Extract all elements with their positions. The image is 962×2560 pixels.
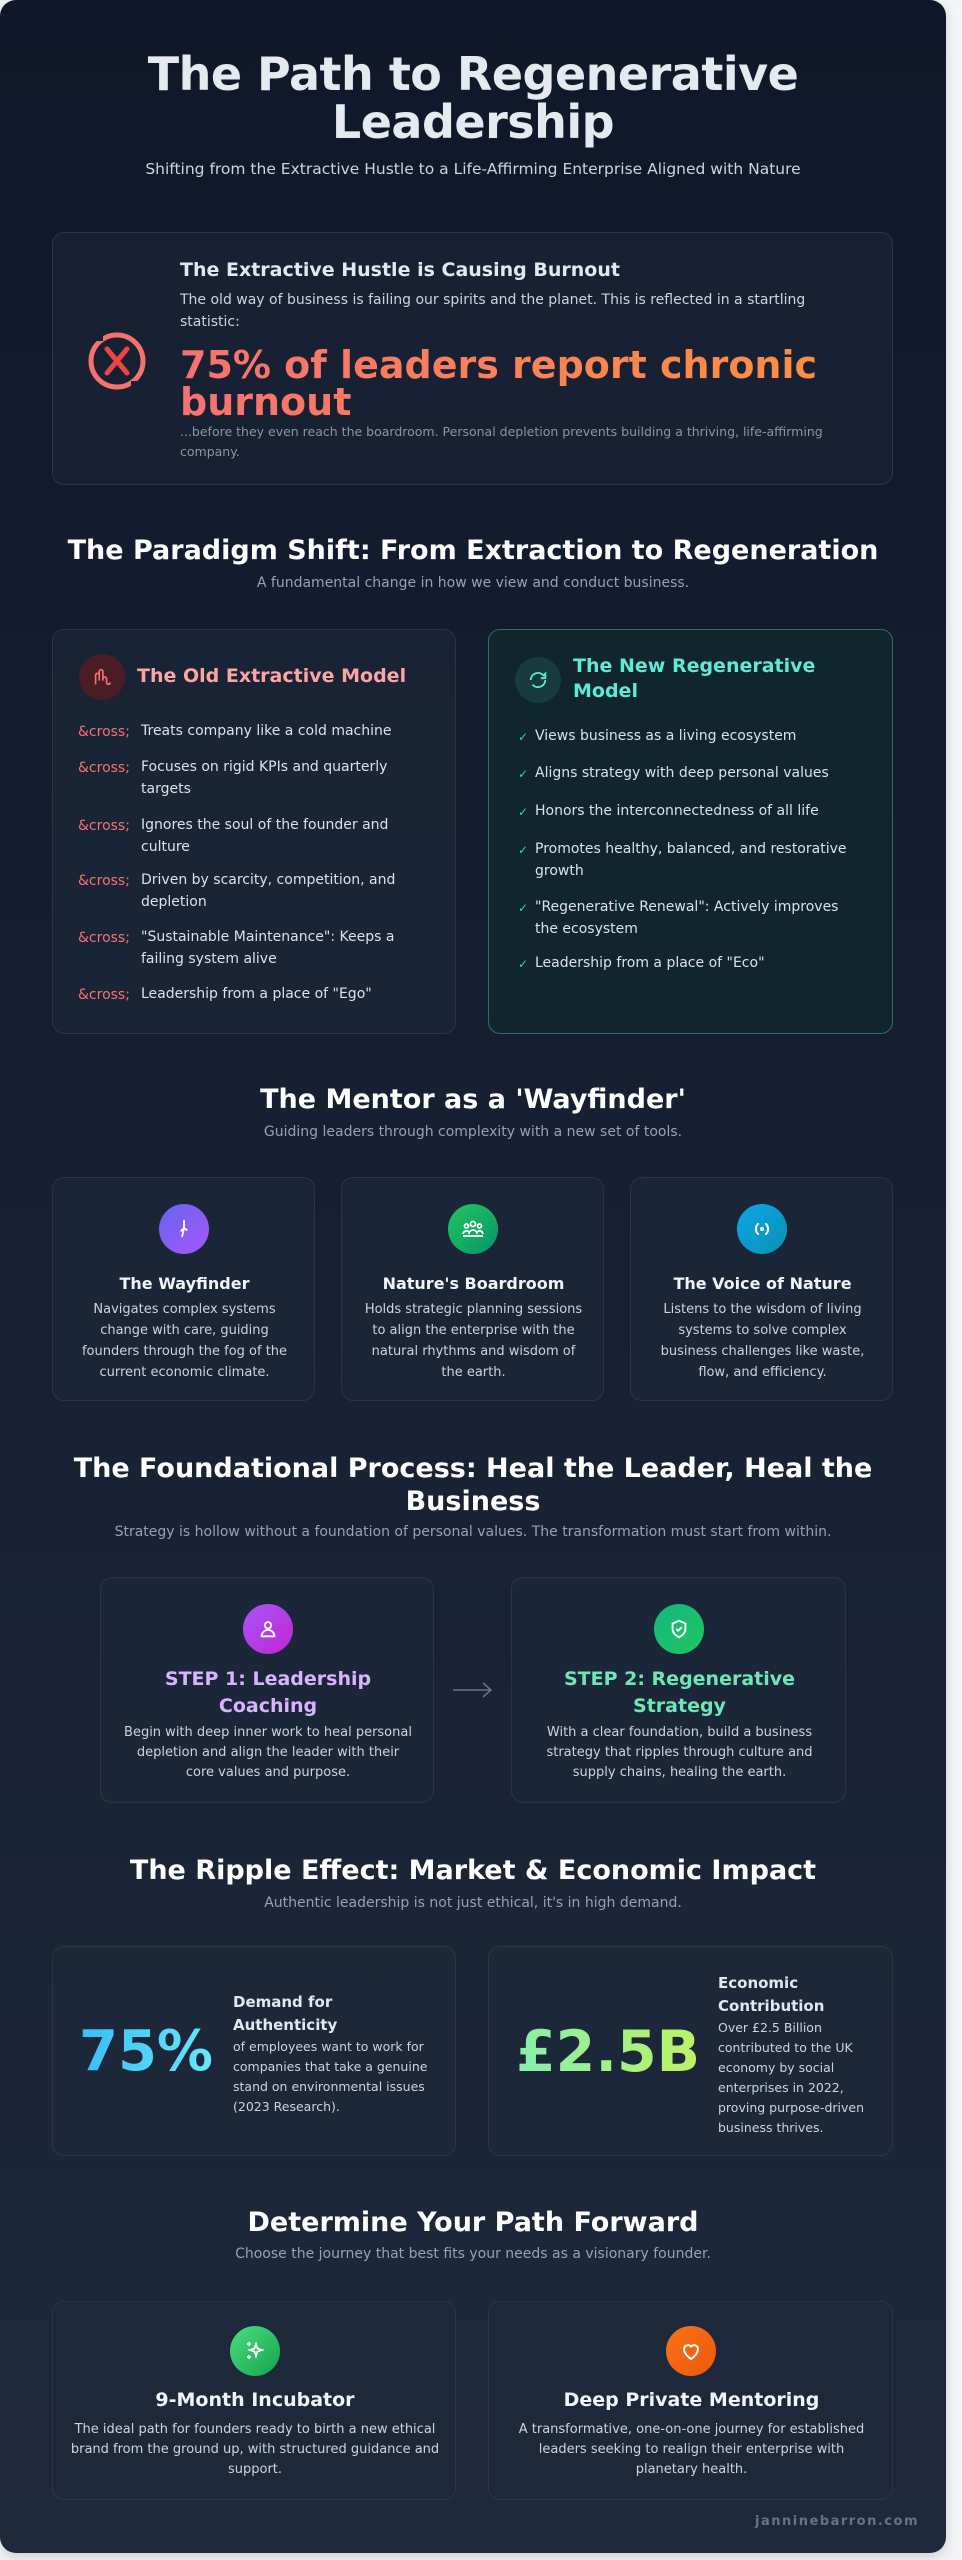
heading: path forward: Determine Your Path Forward: [248, 2207, 698, 2238]
card: step 2: Strategy: [633, 1695, 726, 1717]
list: Focuses on rigid KPIs and quarterly targets: [141, 759, 387, 797]
text: [233, 1993, 427, 2114]
card: boardroom: Holds strategic planning sessions to align the enterprise with the natural rhythms and wisdom of the earth.: [365, 1302, 582, 1380]
title: Leadership: [332, 95, 614, 149]
list: [78, 723, 395, 1003]
text: Strategy is hollow without a foundation of personal values. The transformation must start from within.: [115, 1524, 831, 1540]
list: &cross;: [78, 724, 130, 740]
heading: The Old Extractive Model: [137, 665, 406, 687]
stat card: 75%: [52, 1946, 456, 2156]
list: ✓: [518, 957, 528, 971]
card: boardroom: [341, 1177, 604, 1401]
list: &cross;: [78, 760, 130, 776]
card: boardroom: Nature's Boardroom: [383, 1274, 564, 1293]
heading: paradigm: The Paradigm Shift: From Extraction to Regeneration: [68, 535, 878, 566]
list: ✓: [518, 901, 528, 915]
card: step 1: STEP 1: Leadership: [165, 1668, 371, 1690]
icon: burnout clock: [88, 332, 146, 390]
list: ✓: [518, 730, 528, 744]
card: voice of nature: Listens to the wisdom of living systems to solve complex business challenges like waste, flow, and efficiency.: [661, 1302, 864, 1380]
icon: [654, 1604, 704, 1654]
arrow: [453, 1682, 492, 1698]
list: ✓: [518, 843, 528, 857]
subtitle: Shifting from the Extractive Hustle to a Life-Affirming Enterprise Aligned with Nature: [145, 160, 801, 178]
heading: The New Regenerative Model: [573, 655, 815, 702]
text: Economic: [718, 1974, 798, 1992]
stat: 75% of leaders report chronic burnout: [180, 343, 817, 424]
list: Ignores the soul of the founder and culture: [141, 817, 388, 855]
card: incubator: [52, 2301, 456, 2500]
list: Promotes healthy, balanced, and restorative growth: [535, 841, 846, 879]
number: £2.5B: [516, 2019, 700, 2085]
text: Authentic leadership is not just ethical, it's in high demand.: [264, 1895, 682, 1911]
icon: [666, 2326, 716, 2376]
card: incubator: 9-Month Incubator: [155, 2389, 355, 2411]
heading: The Extractive Hustle is Causing Burnout: [180, 259, 620, 281]
title: [148, 47, 798, 149]
list: Honors the interconnectedness of all life: [535, 803, 819, 819]
list: &cross;: [78, 818, 130, 834]
title: The Path to Regenerative: [148, 47, 798, 101]
list: &cross;: [78, 873, 130, 889]
footnote: ...before they even reach the boardroom. Personal depletion prevents building a thriving, life-affirming company.: [180, 424, 823, 459]
list: Leadership from a place of "Ego": [141, 986, 372, 1002]
text: Demand for: [233, 1993, 332, 2011]
panel: new model: [488, 629, 893, 1034]
card: step 1: Coaching: [219, 1695, 317, 1717]
icon: [230, 2326, 280, 2376]
list: &cross;: [78, 987, 130, 1003]
list: Leadership from a place of "Eco": [535, 955, 765, 971]
list: Driven by scarcity, competition, and depletion: [141, 872, 395, 910]
number: 75%: [79, 2019, 213, 2084]
list: &cross;: [78, 930, 130, 946]
text: Authenticity: [233, 2016, 337, 2034]
list: Treats company like a cold machine: [141, 723, 391, 739]
card: step 2: With a clear foundation, build a business strategy that ripples through culture and supply chains, healing the earth.: [546, 1725, 813, 1780]
list: ✓: [518, 805, 528, 819]
heading: ripple: The Ripple Effect: Market & Economic Impact: [130, 1855, 816, 1886]
footer: janninebarron.com: [755, 2514, 919, 2529]
list: ✓: [518, 767, 528, 781]
card: wayfinder: The Wayfinder: [120, 1274, 249, 1293]
stat card: 2.5B: [488, 1946, 893, 2156]
heading: foundational: The Foundational Process: Heal the Leader, Heal the Business: [74, 1453, 872, 1517]
list: "Sustainable Maintenance": Keeps a failing system alive: [141, 929, 394, 967]
panel: old model: [52, 629, 456, 1034]
list: "Regenerative Renewal": Actively improves the ecosystem: [535, 899, 838, 937]
icon: [159, 1204, 209, 1254]
card: step 2: STEP 2: Regenerative: [564, 1668, 795, 1690]
text: Guiding leaders through complexity with a new set of tools.: [264, 1124, 682, 1140]
panel: burnout: [52, 232, 893, 485]
card: voice of nature: The Voice of Nature: [673, 1274, 852, 1293]
icon: [515, 657, 561, 703]
text: The old way of business is failing our spirits and the planet. This is reflected in a startling statistic:: [180, 292, 805, 330]
card: mentoring: Deep Private Mentoring: [564, 2389, 819, 2411]
text: of employees want to work for companies that take a genuine stand on environmental issues (2023 Research).: [233, 2039, 427, 2114]
icon: [79, 654, 125, 700]
icon: [448, 1204, 498, 1254]
card: step 1: Begin with deep inner work to heal personal depletion and align the leader with their core values and purpose.: [124, 1725, 412, 1780]
text: Over £2.5 Billion contributed to the UK economy by social enterprises in 2022, proving purpose-driven business thrives.: [718, 2020, 864, 2135]
card: voice of nature: [630, 1177, 893, 1401]
card: incubator: The ideal path for founders ready to birth a new ethical brand from the ground up, with structured guidance and support.: [71, 2422, 439, 2477]
card: step 1: [100, 1577, 434, 1803]
list: Aligns strategy with deep personal values: [535, 765, 829, 781]
list: Views business as a living ecosystem: [535, 728, 796, 744]
card: mentoring: A transformative, one-on-one journey for established leaders seeking to realign their enterprise with planetary health.: [519, 2422, 864, 2477]
text: A fundamental change in how we view and conduct business.: [257, 575, 689, 591]
icon: [737, 1204, 787, 1254]
card: wayfinder: [52, 1177, 315, 1401]
card: mentoring: [488, 2301, 893, 2500]
text: Choose the journey that best fits your needs as a visionary founder.: [235, 2246, 711, 2262]
text: Contribution: [718, 1997, 824, 2015]
icon: [243, 1604, 293, 1654]
card: step 2: [511, 1577, 846, 1803]
card: wayfinder: Navigates complex systems change with care, guiding founders through the fog of the current economic climate.: [82, 1302, 287, 1380]
heading: mentor: The Mentor as a 'Wayfinder': [260, 1084, 686, 1115]
list: [518, 728, 846, 971]
